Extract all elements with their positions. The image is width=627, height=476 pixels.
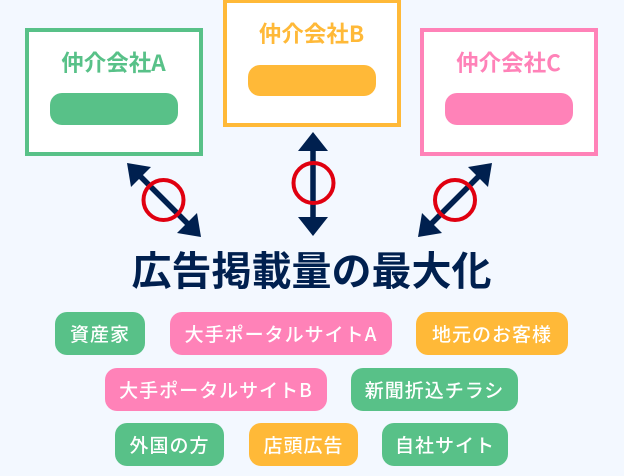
tag: 外国の方: 外国の方 bbox=[129, 431, 210, 458]
tag: 店頭広告 bbox=[249, 423, 358, 466]
tag: 大手ポータルサイトB bbox=[105, 368, 327, 411]
heading: agency C: 仲介会社C bbox=[456, 46, 561, 78]
heading: agency B: 仲介会社B bbox=[259, 17, 364, 49]
bar: agency C bbox=[445, 93, 573, 125]
arrow: center double-headed with circle bbox=[294, 132, 334, 236]
tag: 大手ポータルサイトA bbox=[170, 312, 392, 355]
bar: agency A bbox=[50, 93, 178, 125]
tag: 自社サイト bbox=[382, 423, 508, 466]
tag: 大手ポータルサイトB: 大手ポータルサイトB bbox=[119, 376, 313, 403]
panel: agency A bbox=[25, 28, 203, 156]
tag: 店頭広告: 店頭広告 bbox=[263, 431, 344, 458]
panel: agency C bbox=[420, 28, 598, 156]
tag: 地元のお客様 bbox=[416, 312, 568, 355]
tag: 資産家: 資産家 bbox=[70, 320, 130, 347]
arrow: left double-headed with circle bbox=[127, 163, 201, 237]
tag: 自社サイト: 自社サイト bbox=[395, 431, 495, 458]
bar: agency B bbox=[248, 65, 376, 96]
tag: 新聞折込チラシ: 新聞折込チラシ bbox=[365, 376, 504, 403]
tag: 新聞折込チラシ bbox=[351, 368, 518, 411]
tag: 大手ポータルサイトA: 大手ポータルサイトA bbox=[185, 320, 377, 347]
tag: 資産家 bbox=[55, 312, 145, 355]
arrow: right double-headed with circle bbox=[418, 163, 492, 237]
title: 広告掲載量の最大化 bbox=[132, 239, 492, 297]
panel: agency B bbox=[223, 0, 401, 127]
tag: 外国の方 bbox=[115, 423, 224, 466]
heading: agency A: 仲介会社A bbox=[61, 46, 166, 78]
tag: 地元のお客様: 地元のお客様 bbox=[432, 320, 552, 347]
